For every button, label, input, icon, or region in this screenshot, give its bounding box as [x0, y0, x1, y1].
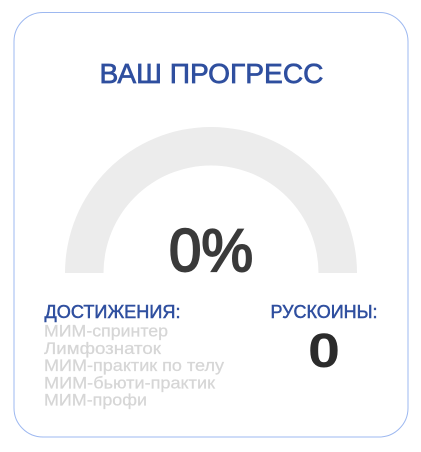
- achievements list: Лимфознаток: [44, 340, 162, 358]
- achievements list: МИМ-профи: [44, 392, 147, 410]
- title: ВАШ ПРОГРЕСС: [100, 58, 324, 89]
- coins block: [270, 302, 378, 378]
- gauge value: 0%: [169, 217, 253, 284]
- achievements list: [44, 322, 225, 410]
- achievements list: МИМ-спринтер: [44, 322, 168, 340]
- achievements list: МИМ-бьюти-практик: [44, 374, 216, 392]
- coins value: 0: [308, 325, 340, 378]
- achievements block: [44, 302, 225, 410]
- coins heading: РУСКОИНЫ:: [270, 302, 378, 322]
- achievements list: МИМ-практик по телу: [44, 357, 225, 375]
- achievements heading: ДОСТИЖЕНИЯ:: [44, 302, 180, 322]
- gauge chart: semicircle track: [65, 127, 357, 273]
